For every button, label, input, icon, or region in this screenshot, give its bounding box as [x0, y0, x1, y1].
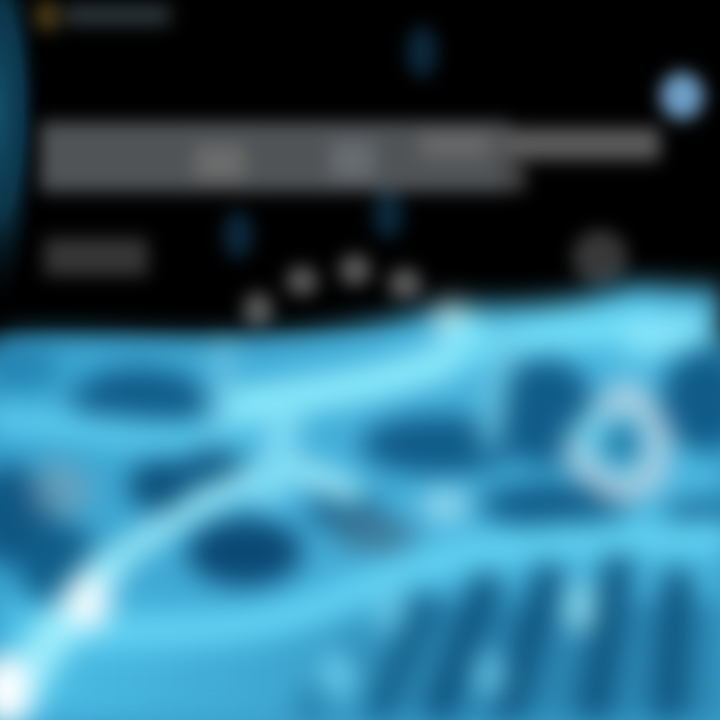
highlights — [0, 302, 595, 720]
left edge glow — [0, 0, 46, 320]
wave base — [0, 284, 720, 720]
underlying wave floor — [0, 325, 720, 720]
background particles — [223, 26, 437, 259]
dark hollows — [0, 346, 720, 607]
logo mark — [34, 0, 60, 32]
bright filaments — [0, 318, 720, 708]
arc of dots — [243, 254, 422, 328]
grey cluster left — [28, 460, 92, 520]
hexagon ring — [574, 392, 660, 492]
lower diagonal stripes — [300, 555, 678, 720]
upper dark zone — [34, 0, 704, 328]
wave field — [0, 284, 720, 720]
right caption — [572, 230, 628, 286]
logo wordmark — [65, 5, 170, 25]
lower floor tint — [0, 600, 720, 720]
top-right glowing dot — [660, 72, 704, 120]
left caption — [44, 238, 148, 276]
logo — [34, 0, 170, 32]
title block (illegible in reference) — [40, 122, 660, 192]
